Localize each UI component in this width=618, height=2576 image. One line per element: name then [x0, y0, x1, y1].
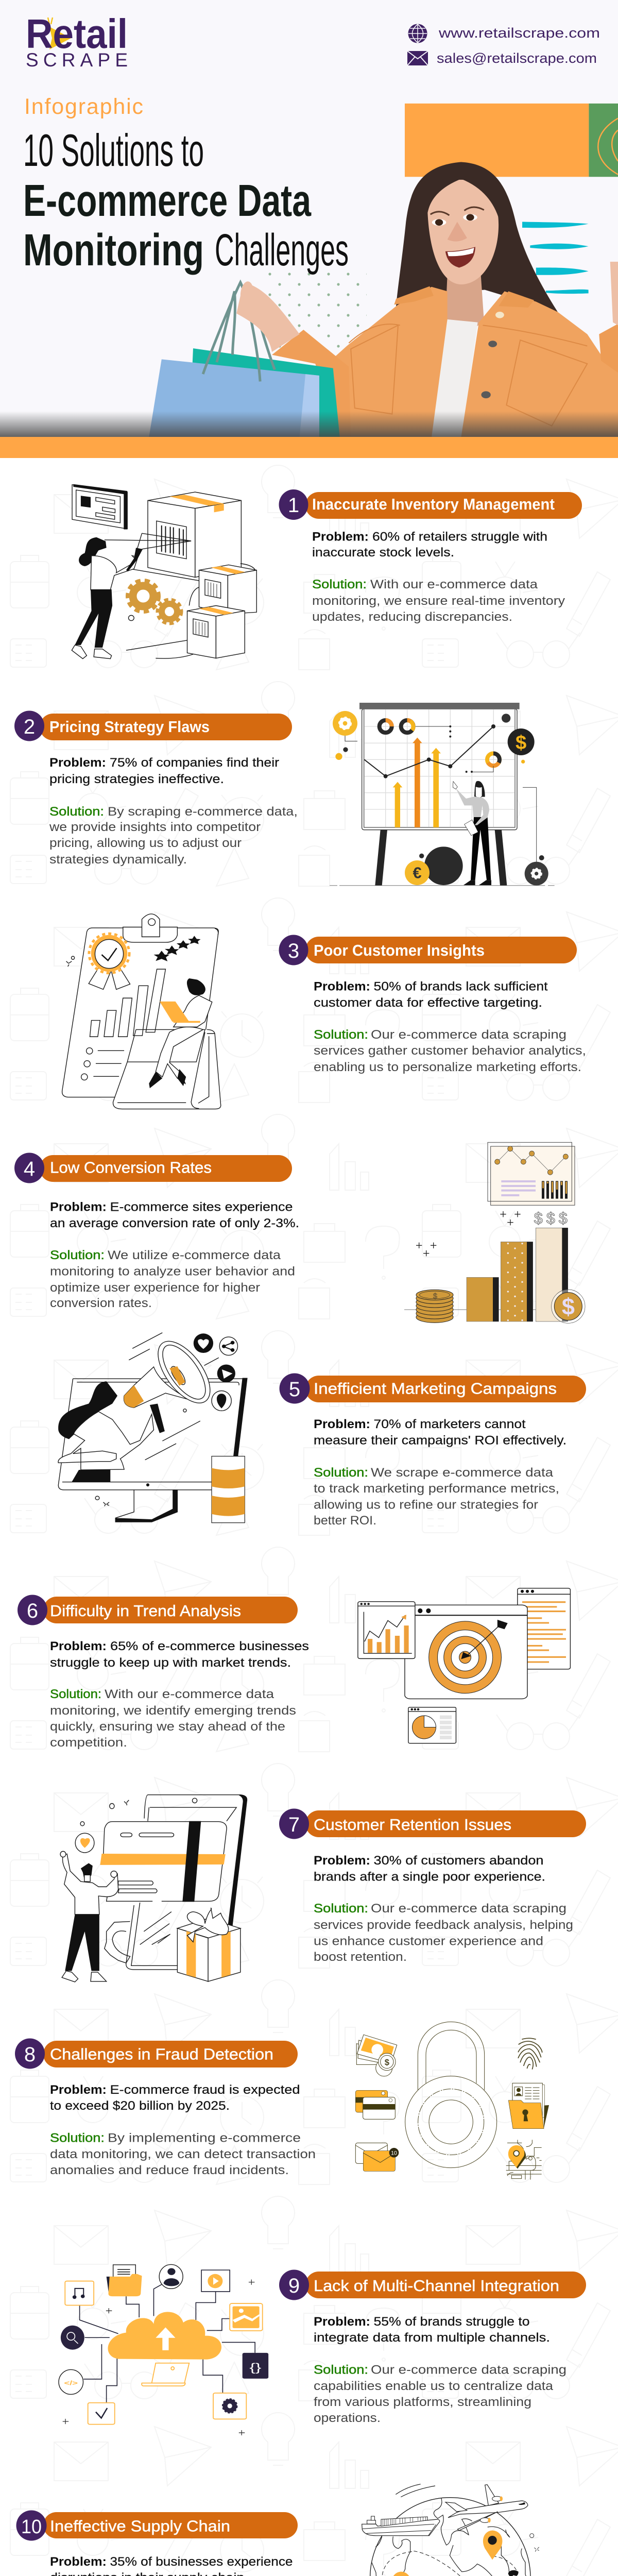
- icon: ship: [362, 2516, 440, 2536]
- title: Challenges: [215, 225, 349, 275]
- heading: 10: [21, 2516, 42, 2538]
- text: problem and solution: Problem:: [50, 2083, 107, 2097]
- text: problem and solution: brands after a single poor experience.: [314, 1870, 545, 1884]
- text: problem and solution: Solution:: [50, 1687, 101, 1701]
- section 2: pricing strategy flaws: [14, 703, 555, 886]
- text: problem and solution: pricing, allowing us to adjust our: [49, 836, 242, 850]
- heading: Customer Retention Issues: [314, 1816, 511, 1834]
- text: problem and solution: Problem:: [314, 1417, 370, 1431]
- text: problem and solution: [314, 1854, 573, 1964]
- text: problem and solution: With our e-commerce data: [370, 578, 538, 591]
- orange band: [0, 437, 618, 458]
- text: problem and solution: conversion rates.: [50, 1296, 152, 1310]
- illustration: target and analytics windows: [358, 1588, 570, 1743]
- text: problem and solution: allowing us to refine our strategies for: [314, 1498, 538, 1512]
- icon: envelope: [407, 51, 428, 65]
- heading: 1: [288, 494, 299, 517]
- text: problem and solution: anomalies and reduce fraud incidents.: [50, 2163, 289, 2177]
- text: problem and solution: Our e-commerce data scraping: [371, 2363, 566, 2377]
- title: Infographic: [24, 94, 143, 119]
- icon: map pins: [391, 2531, 502, 2576]
- heading: Lack of Multi-Channel Integration: [314, 2277, 559, 2295]
- heading: [18, 1595, 298, 1625]
- title: Monitoring: [23, 225, 204, 275]
- illustration: bar growth with coins: $: [433, 1293, 437, 1301]
- text: problem and solution: Problem:: [314, 2315, 370, 2329]
- text: problem and solution: 70% of marketers cannot: [374, 1417, 526, 1431]
- heading: [279, 1808, 586, 1839]
- text: problem and solution: Solution:: [50, 1248, 105, 1262]
- contact details: www.retailscrape.com: [438, 25, 600, 41]
- heading: [279, 935, 577, 965]
- section 3: poor customer insights: [62, 914, 586, 1109]
- text: problem and solution: Solution:: [314, 1028, 368, 1042]
- text: problem and solution: data monitoring, we can detect transaction: [50, 2147, 316, 2161]
- heading: 4: [24, 1158, 35, 1180]
- text: problem and solution: Our e-commerce data scraping: [371, 1028, 566, 1042]
- title: E-commerce Data: [23, 176, 311, 226]
- heading: 6: [27, 1600, 38, 1622]
- text: problem and solution: [49, 756, 298, 867]
- contact details: sales@retailscrape.com: [437, 50, 597, 66]
- section 9: lack of multi-channel integration: [59, 2264, 586, 2435]
- text: problem and solution: from various platforms, streamlining: [314, 2395, 531, 2409]
- icon: globe: [408, 24, 427, 43]
- text: problem and solution: With our e-commerce data: [105, 1687, 274, 1701]
- heading: [15, 2038, 298, 2069]
- section 4: low conversion rates: [14, 1142, 585, 1323]
- illustration: cloud network: {}: [249, 2361, 262, 2374]
- heading: Low Conversion Rates: [50, 1158, 212, 1177]
- icon: fingerprint: [518, 2038, 542, 2070]
- illustration: padlock and security icons: [355, 2022, 549, 2180]
- text: problem and solution: 35% of businesses experience: [110, 2555, 293, 2569]
- heading: Difficulty in Trend Analysis: [50, 1602, 241, 1620]
- text: problem and solution: By implementing e-commerce: [108, 2131, 301, 2145]
- text: problem and solution: monitoring, we identify emerging trends: [50, 1704, 296, 1718]
- text: problem and solution: 30% of customers abandon: [374, 1854, 544, 1868]
- heading: [16, 2510, 298, 2541]
- heading: Challenges in Fraud Detection: [50, 2045, 273, 2063]
- text: problem and solution: operations.: [314, 2411, 381, 2425]
- icon: mail: [355, 2143, 399, 2171]
- text: problem and solution: to track marketing performance metrics,: [314, 1482, 559, 1496]
- illustration: bar growth with coins: [404, 1142, 585, 1323]
- illustration: presentation board: [330, 703, 555, 886]
- heading: 9: [288, 2275, 300, 2297]
- text: problem and solution: strategies dynamically.: [49, 853, 187, 867]
- text: problem and solution: [312, 530, 565, 624]
- text: problem and solution: monitoring, we ensure real-time inventory: [312, 594, 565, 608]
- illustration: clipboard with badge: [62, 914, 221, 1109]
- icon: mail: 10: [391, 2150, 397, 2156]
- text: problem and solution: boost retention.: [314, 1950, 407, 1964]
- text: problem and solution: [50, 1200, 299, 1310]
- heading: 8: [24, 2043, 36, 2066]
- heading: Inaccurate Inventory Management: [312, 495, 555, 513]
- text: problem and solution: We utilize e-commerce data: [108, 1248, 281, 1262]
- text: problem and solution: monitoring to analyze user behavior and: [50, 1264, 295, 1279]
- text: problem and solution: Solution:: [314, 2363, 368, 2377]
- text: problem and solution: E-commerce sites experience: [110, 1200, 293, 1214]
- header: [0, 0, 618, 458]
- heading: [279, 1374, 586, 1403]
- text: problem and solution: [314, 2315, 566, 2425]
- heading: [14, 711, 292, 741]
- text: problem and solution: Problem:: [312, 530, 369, 544]
- heading: 7: [288, 1814, 300, 1836]
- icon: locked folder: [508, 2083, 549, 2129]
- text: problem and solution: an average conversion rate of only 2-3%.: [50, 1216, 299, 1230]
- text: problem and solution: By scraping e-commerce data,: [108, 805, 298, 819]
- illustration: warehouse scanning: [72, 484, 256, 659]
- text: problem and solution: services gather customer behavior analytics,: [314, 1044, 586, 1058]
- icon: banknotes and coins: $: [385, 2057, 390, 2067]
- icon: credit cards: [355, 2090, 395, 2119]
- text: problem and solution: us enhance customer experience and: [314, 1934, 543, 1948]
- text: problem and solution: to exceed $20 billion by 2025.: [50, 2099, 230, 2113]
- text: problem and solution: updates, reducing discrepancies.: [312, 610, 512, 624]
- logo: SCRAPE: [26, 49, 128, 71]
- text: problem and solution: pricing strategies ineffective.: [49, 772, 224, 786]
- text: problem and solution: capabilities enable us to centralize data: [314, 2379, 554, 2393]
- text: problem and solution: better ROI.: [314, 1514, 376, 1528]
- heading: Inefficient Marketing Campaigns: [314, 1380, 557, 1398]
- illustration: bar growth with coins: $: [559, 1210, 568, 1227]
- illustration: global logistics: [355, 2484, 550, 2576]
- text: problem and solution: Problem:: [49, 756, 106, 770]
- icon: dollar: $: [516, 732, 526, 754]
- text: problem and solution: struggle to keep up with market trends.: [50, 1656, 291, 1670]
- section 8: challenges in fraud detection: [15, 2022, 549, 2180]
- section 5: inefficient marketing campaigns: [58, 1333, 586, 1528]
- text: problem and solution: integrate data from multiple channels.: [314, 2331, 550, 2345]
- text: problem and solution: E-commerce fraud is expected: [110, 2083, 300, 2097]
- illustration: bar growth with coins: $: [562, 1294, 575, 1320]
- text: problem and solution: Problem:: [50, 2555, 107, 2569]
- person: [494, 2570, 538, 2576]
- title: 10 Solutions to: [23, 125, 204, 176]
- gears: [128, 581, 181, 623]
- illustration: phone, card and gift: [60, 1795, 247, 1982]
- icon: dollar: [508, 728, 535, 755]
- text: problem and solution: Problem:: [50, 1200, 107, 1214]
- text: problem and solution: Solution:: [314, 1466, 368, 1480]
- text: problem and solution: we provide insights into competitor: [49, 820, 261, 834]
- text: problem and solution: inaccurate stock levels.: [312, 546, 454, 560]
- illustration: cloud network: [59, 2264, 268, 2435]
- icon: plane: [445, 2485, 528, 2531]
- text: problem and solution: Problem:: [50, 1639, 107, 1653]
- title: [23, 94, 349, 275]
- text: problem and solution: We scrape e-commerce data: [371, 1466, 554, 1480]
- hero photo: woman with shopping bags: [149, 104, 618, 437]
- illustration: bar growth with coins: $: [546, 1210, 555, 1227]
- text: problem and solution: 75% of companies find their: [110, 756, 279, 770]
- icon: euro: [405, 860, 430, 885]
- heading: [279, 2270, 586, 2300]
- section 1: inaccurate inventory management: [72, 484, 582, 659]
- heading: [279, 489, 582, 520]
- heading: Pricing Strategy Flaws: [49, 718, 210, 736]
- text: problem and solution: Solution:: [50, 2131, 105, 2145]
- logo: Retail: [26, 11, 128, 57]
- text: problem and solution: Problem:: [314, 980, 370, 993]
- text: problem and solution: [50, 1639, 309, 1750]
- icon: gear: [333, 711, 357, 736]
- text: problem and solution: enabling us to personalize marketing efforts.: [314, 1060, 581, 1074]
- text: problem and solution: competition.: [50, 1736, 127, 1750]
- text: problem and solution: [50, 2555, 319, 2576]
- heading: 5: [289, 1378, 300, 1401]
- text: problem and solution: quickly, ensuring we stay ahead of the: [50, 1720, 285, 1734]
- text: problem and solution: Solution:: [312, 578, 367, 591]
- text: problem and solution: Solution:: [49, 805, 104, 819]
- icon: banknotes and coins: [356, 2035, 397, 2076]
- illustration: cloud network: </>: [64, 2380, 78, 2387]
- illustration: megaphone and monitor: [58, 1333, 248, 1523]
- text: problem and solution: [314, 980, 586, 1074]
- text: problem and solution: 60% of retailers struggle with: [372, 530, 547, 544]
- illustration: bar growth with coins: $: [534, 1210, 543, 1227]
- text: problem and solution: optimize user experience for higher: [50, 1281, 260, 1295]
- section 6: difficulty in trend analysis: [18, 1588, 570, 1750]
- text: problem and solution: 50% of brands lack sufficient: [374, 980, 548, 993]
- text: problem and solution: Problem:: [314, 1854, 370, 1868]
- heading: [14, 1153, 292, 1183]
- text: problem and solution: [50, 2083, 316, 2177]
- section 10: ineffective supply chain: [16, 2484, 550, 2576]
- icon: euro: €: [413, 865, 422, 882]
- text: problem and solution: 65% of e-commerce businesses: [110, 1639, 309, 1653]
- heading: Ineffective Supply Chain: [50, 2517, 230, 2535]
- text: problem and solution: measure their campaigns' ROI effectively.: [314, 1434, 566, 1448]
- text: problem and solution: Our e-commerce data scraping: [371, 1902, 566, 1916]
- text: problem and solution: customer data for effective targeting.: [314, 996, 542, 1010]
- text: problem and solution: 55% of brands struggle to: [374, 2315, 529, 2329]
- contact details: [407, 24, 600, 66]
- icon: map pin: [506, 2140, 542, 2180]
- section 7: customer retention issues: [60, 1795, 586, 1982]
- heading: 3: [288, 940, 299, 962]
- text: problem and solution: Solution:: [314, 1902, 368, 1916]
- heading: Poor Customer Insights: [314, 941, 485, 959]
- text: problem and solution: services provide feedback analysis, helping: [314, 1918, 573, 1932]
- text: problem and solution: [314, 1417, 566, 1528]
- heading: 2: [24, 716, 35, 738]
